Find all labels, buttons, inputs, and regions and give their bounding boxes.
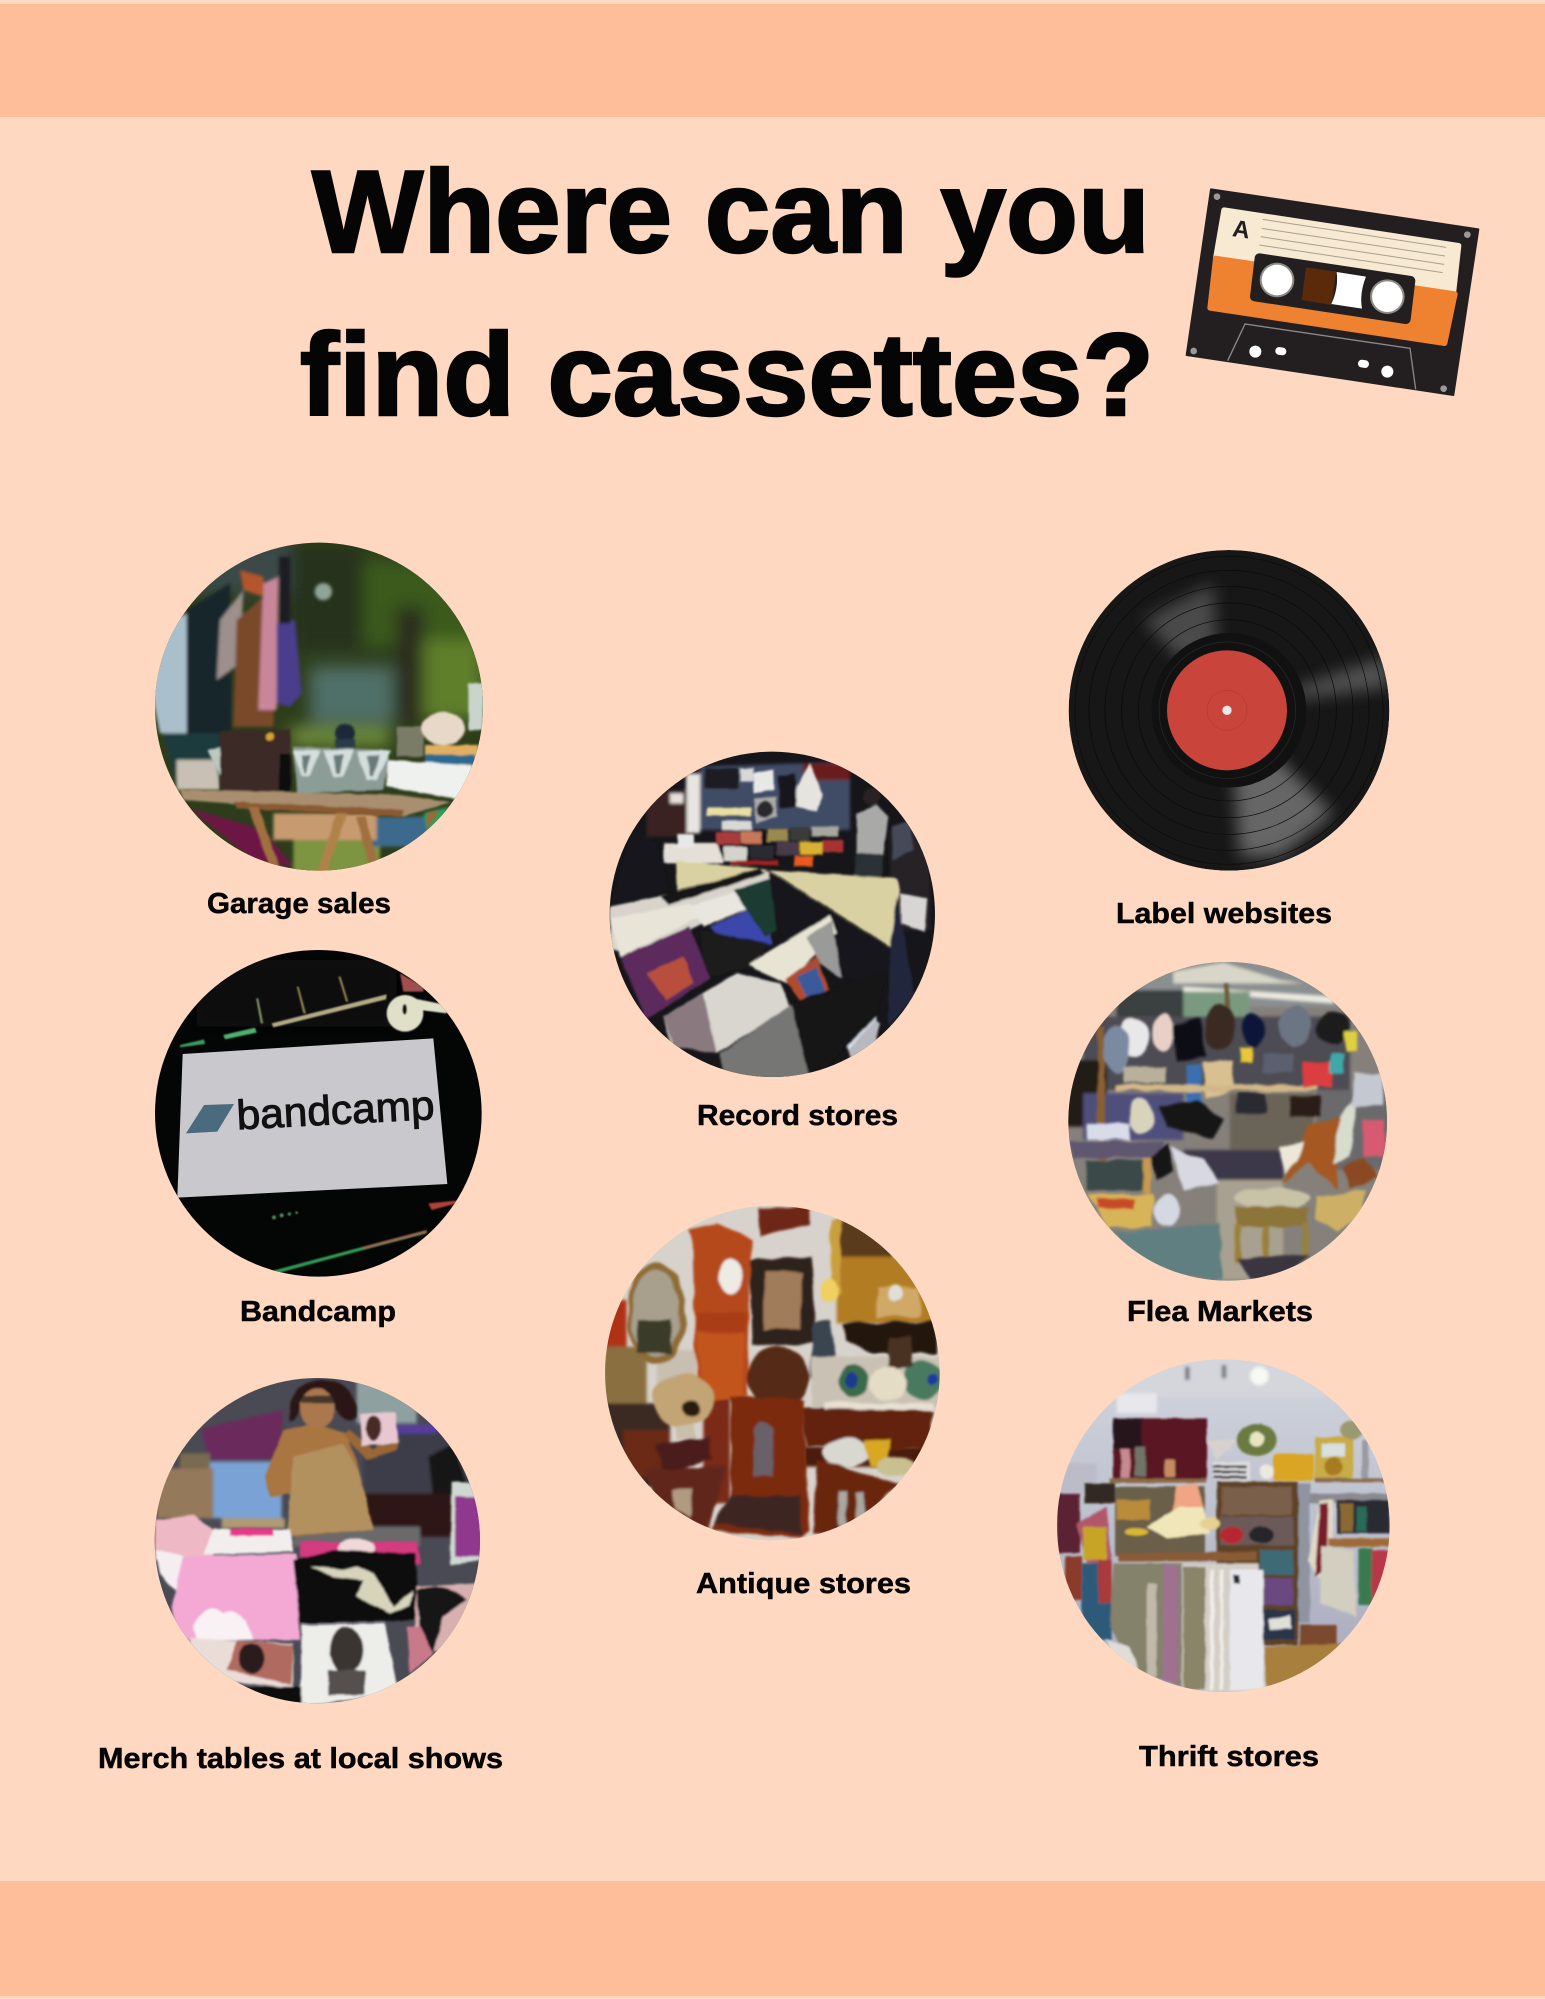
label: flea markets: Flea Markets (1127, 1296, 1313, 1328)
photo: garage sale table (150, 540, 487, 873)
photo: bandcamp on phone: bandcamp (235, 1082, 436, 1138)
photo: merch table (147, 1373, 487, 1713)
icon: vinyl record (1069, 550, 1390, 871)
icon: cassette tape: A (1231, 215, 1252, 244)
photo: bandcamp on phone (150, 947, 487, 1280)
panel: garage sales (150, 540, 487, 920)
bottom banner (0, 1881, 1545, 1996)
title: find cassettes? (300, 309, 1154, 440)
title (300, 146, 1154, 440)
label: label websites: Label websites (1116, 898, 1332, 930)
photo: flea market (1063, 957, 1397, 1290)
title: Where can you (312, 146, 1150, 277)
label: garage sales: Garage sales (207, 888, 391, 920)
label: record stores: Record stores (697, 1100, 898, 1132)
panel: label websites (1069, 550, 1390, 930)
label: bandcamp: Bandcamp (240, 1296, 396, 1328)
panel: flea markets (1063, 957, 1397, 1328)
panel: antique stores (600, 1200, 947, 1600)
label: antique stores: Antique stores (696, 1568, 911, 1600)
panel: record stores (603, 747, 943, 1132)
photo: antique store (600, 1200, 947, 1547)
icon: cassette tape (1187, 189, 1478, 395)
top banner (0, 4, 1545, 117)
photo: record store (603, 747, 943, 1083)
photo: thrift store (1053, 1357, 1393, 1697)
label: merch tables: Merch tables at local shows (98, 1743, 503, 1775)
label: thrift stores: Thrift stores (1139, 1741, 1319, 1773)
panel: bandcamp (150, 947, 487, 1328)
panel: thrift stores (1053, 1357, 1393, 1773)
panel: merch tables (98, 1373, 503, 1775)
